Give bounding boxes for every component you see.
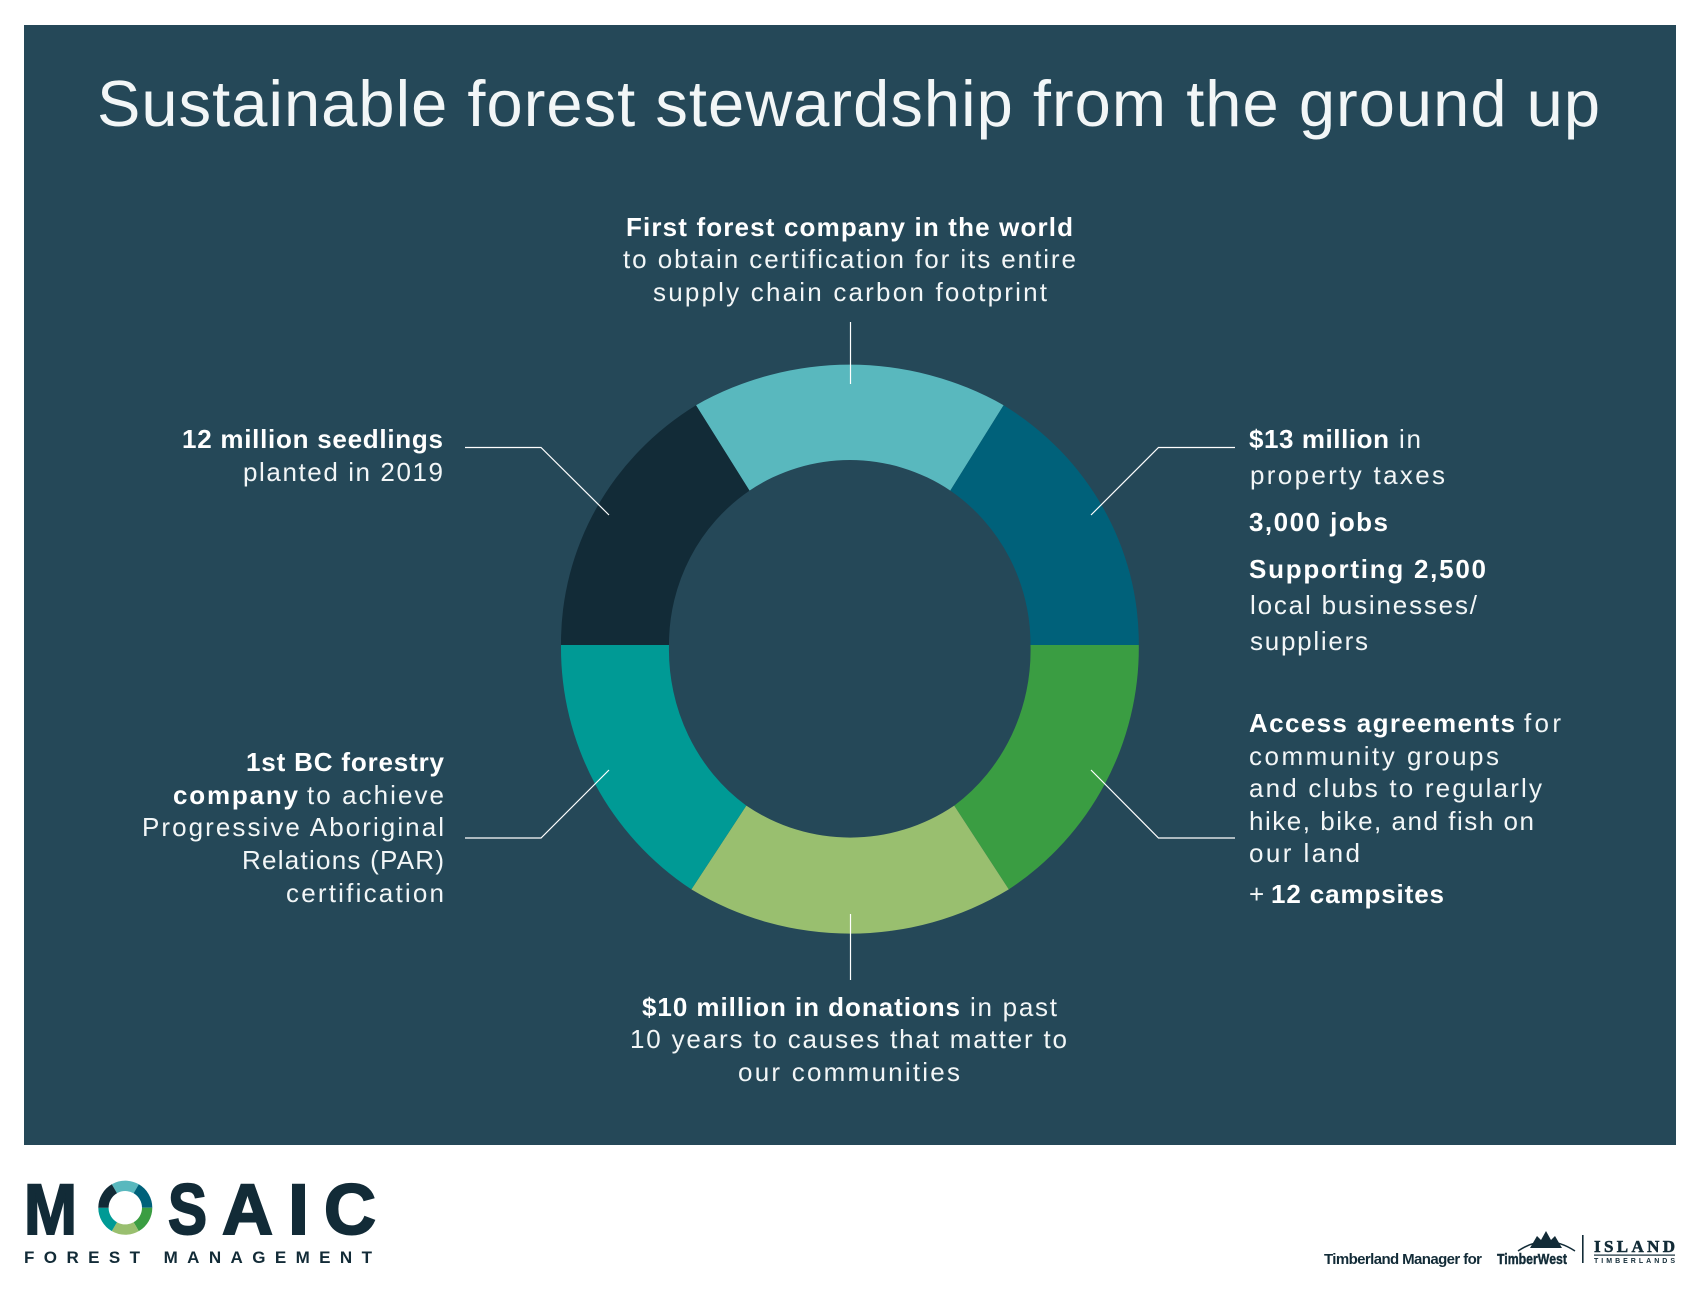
leader line: upper right	[1091, 448, 1235, 515]
segment: top light teal	[696, 365, 1004, 491]
segment: lower left teal	[561, 645, 746, 889]
icon: logo ring	[98, 1181, 152, 1235]
text block: donations: our communities	[738, 1057, 960, 1087]
text block: access agreements: Access agreements	[1249, 708, 1515, 738]
text block: donations: 10 years to causes that matter to	[630, 1024, 1067, 1054]
text block: 12 million seedlings	[182, 424, 443, 487]
logo: Mosaic Forest Management: S	[168, 1171, 207, 1250]
leader line: upper left	[465, 448, 609, 515]
leader line: lower left	[465, 770, 609, 838]
text block: first forest company: supply chain carbon footprint	[653, 277, 1048, 307]
logo: TimberWest	[1497, 1231, 1575, 1268]
text block: 12 million seedlings: planted in 2019	[243, 457, 443, 487]
text block: first forest company	[623, 212, 1076, 307]
text block: donations	[630, 992, 1067, 1087]
text block: property taxes, jobs, suppliers: property taxes	[1250, 460, 1445, 490]
text block: access agreements	[1249, 708, 1561, 909]
leader line: top	[850, 322, 852, 384]
text block: property taxes, jobs, suppliers: 3,000 jobs	[1249, 507, 1388, 537]
logo: Island Timberlands: TIMBERLANDS	[1594, 1258, 1675, 1265]
text block: access agreements: hike, bike, and fish on	[1249, 806, 1534, 836]
logo: Mosaic Forest Management: C	[324, 1171, 376, 1250]
text block: 1st BC forestry company: company	[173, 780, 299, 810]
text block: 1st BC forestry company: 1st BC forestry	[246, 747, 445, 777]
text block: donations: $10 million in donations	[642, 992, 960, 1022]
text block: first forest company: to obtain certification for its entire	[623, 244, 1076, 274]
text block: 1st BC forestry company: Progressive Aboriginal	[142, 812, 444, 842]
text block: 1st BC forestry company	[142, 747, 445, 908]
logo: Island Timberlands: ISLAND	[1594, 1237, 1675, 1256]
text block: property taxes, jobs, suppliers: $13 million	[1249, 424, 1389, 454]
text block: access agreements: +	[1249, 879, 1264, 909]
divider line	[1582, 1235, 1584, 1263]
text block: access agreements: our land	[1249, 838, 1360, 868]
text block: property taxes, jobs, suppliers: suppliers	[1250, 626, 1368, 656]
logo: Mosaic Forest Management: FOREST MANAGEMENT	[24, 1248, 373, 1267]
logo: Mosaic Forest Management: I	[288, 1171, 309, 1250]
text block: access agreements: community groups	[1249, 741, 1499, 771]
leader line: bottom	[850, 914, 852, 980]
title: Sustainable forest stewardship from the ground up	[97, 67, 1600, 140]
text block: first forest company: First forest company in the world	[626, 212, 1073, 242]
footer: timberland manager credit: Timberland Manager for	[1324, 1251, 1482, 1268]
logo: Island Timberlands	[1594, 1237, 1675, 1265]
leader line: lower right	[1091, 770, 1235, 838]
segment: upper right blue	[950, 405, 1139, 645]
text block: 1st BC forestry company: to achieve	[307, 780, 444, 810]
text block: 12 million seedlings: 12 million seedlings	[182, 424, 443, 454]
text block: 1st BC forestry company: Relations (PAR)	[242, 845, 444, 875]
logo: Mosaic Forest Management: A	[222, 1171, 273, 1250]
segment: upper left dark navy	[561, 405, 750, 645]
footer: timberland manager credit	[1324, 1231, 1675, 1268]
logo: Mosaic Forest Management	[24, 1171, 376, 1267]
text block: property taxes, jobs, suppliers	[1249, 424, 1486, 656]
text block: property taxes, jobs, suppliers: in	[1399, 424, 1421, 454]
logo: Mosaic Forest Management: M	[24, 1171, 77, 1250]
text block: property taxes, jobs, suppliers: Supporting 2,500	[1249, 554, 1486, 584]
text block: property taxes, jobs, suppliers: local businesses/	[1250, 590, 1478, 620]
text block: donations: in past	[970, 992, 1058, 1022]
logo: TimberWest: TimberWest	[1497, 1251, 1567, 1268]
segment: lower right green	[954, 645, 1139, 889]
text block: access agreements: for	[1524, 708, 1561, 738]
text block: access agreements: 12 campsites	[1271, 879, 1444, 909]
donut chart	[561, 365, 1139, 934]
text block: 1st BC forestry company: certification	[286, 878, 444, 908]
text block: access agreements: and clubs to regularly	[1249, 773, 1542, 803]
segment: bottom light green	[691, 806, 1009, 934]
